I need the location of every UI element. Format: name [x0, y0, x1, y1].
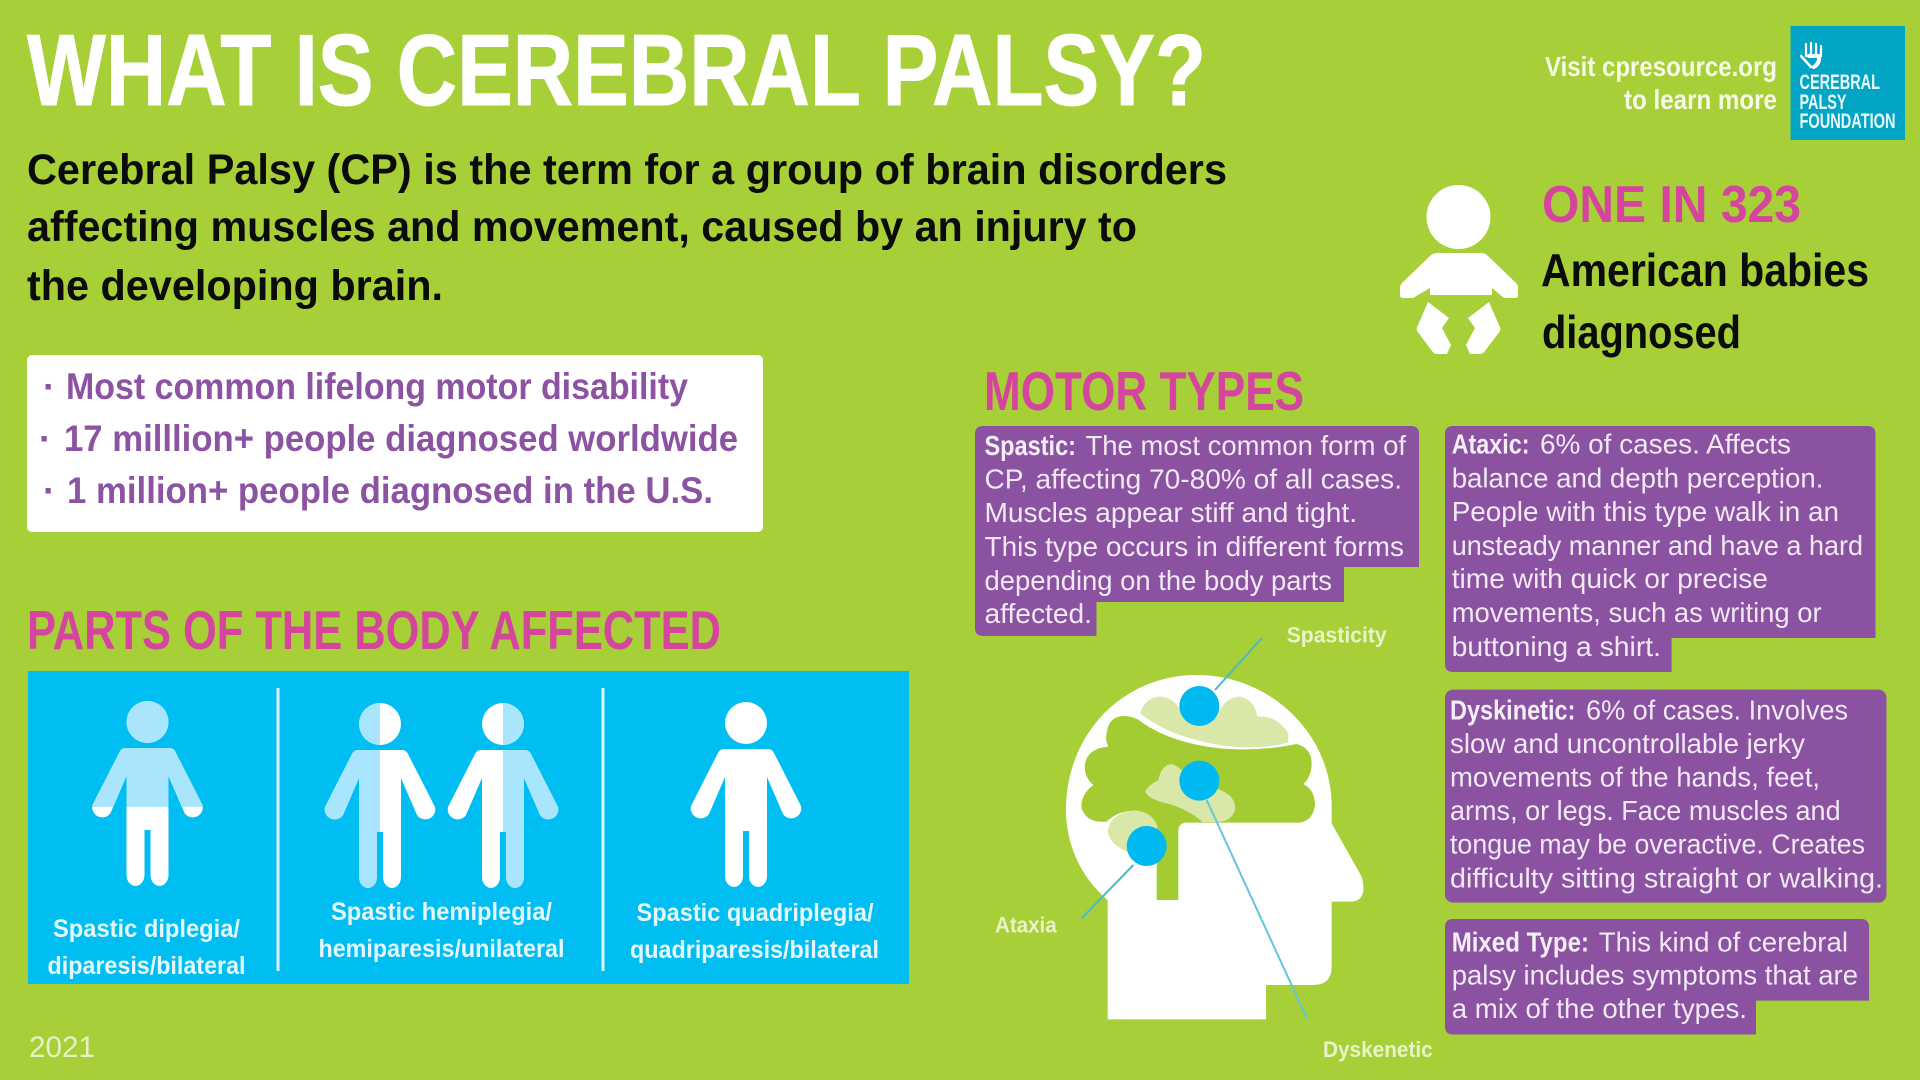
stat: one in 323: ONE IN 323 — [1542, 176, 1801, 234]
stat: one in 323: diagnosed — [1542, 306, 1741, 358]
panel: spastic: This type occurs in different forms — [984, 531, 1404, 562]
label: hemiplegia — [318, 898, 564, 963]
label: hemiplegia: hemiparesis/unilateral — [318, 935, 564, 963]
panel: spastic — [975, 426, 1419, 636]
logo: cerebral palsy foundation — [1790, 26, 1905, 140]
panel: ataxic: Ataxic: — [1452, 429, 1530, 460]
stat: one in 323: American babies — [1541, 244, 1869, 296]
icon: baby — [1400, 185, 1518, 354]
panel: spastic: Muscles appear stiff and tight. — [984, 497, 1357, 528]
panel: ataxic: buttoning a shirt. — [1452, 631, 1661, 662]
label: quadriplegia: quadriparesis/bilateral — [630, 936, 879, 964]
logo: cerebral palsy foundation: PALSY — [1800, 91, 1846, 114]
intro definition text: the developing brain. — [27, 262, 443, 310]
intro definition text: affecting muscles and movement, caused by an injury to — [27, 203, 1137, 251]
panel: key facts: 17 milllion+ people diagnosed worldwide — [64, 418, 738, 459]
head silhouette — [1066, 675, 1363, 1019]
panel: dyskinetic: Dyskinetic: — [1450, 694, 1575, 725]
panel: key facts: · — [43, 366, 55, 407]
intro definition text — [27, 146, 1227, 310]
panel: key facts: 1 million+ people diagnosed in the U.S. — [67, 470, 713, 511]
label: hemiplegia: Spastic hemiplegia/ — [331, 898, 552, 926]
diagram: brain in head — [995, 623, 1433, 1062]
panel: mixed type: Mixed Type: — [1452, 927, 1589, 958]
label: diplegia: Spastic diplegia/ — [53, 915, 240, 943]
label: diplegia: diparesis/bilateral — [48, 952, 246, 980]
panel: dyskinetic: slow and uncontrollable jerky — [1450, 728, 1805, 759]
panel: ataxic: balance and depth perception. — [1452, 463, 1823, 494]
icon: figure quadriplegia — [691, 702, 801, 887]
icon: figure spastic diplegia — [92, 701, 203, 886]
intro definition text: Cerebral Palsy (CP) is the term for a group of brain disorders — [27, 146, 1227, 194]
panel: key facts: · — [43, 470, 55, 511]
panel: ataxic — [1445, 426, 1876, 672]
logo: cerebral palsy foundation: CEREBRAL — [1800, 71, 1880, 94]
panel: ataxic: time with quick or precise — [1452, 563, 1768, 594]
label: spasticity: Spasticity — [1287, 623, 1387, 648]
panel: dyskinetic: arms, or legs. Face muscles and — [1450, 795, 1841, 826]
panel: mixed type — [1445, 919, 1869, 1034]
label: ataxia: Ataxia — [995, 913, 1057, 938]
upper affected region — [1140, 697, 1288, 748]
panel: mixed type: palsy includes symptoms that are — [1452, 960, 1858, 991]
panel: ataxic: movements, such as writing or — [1452, 597, 1822, 628]
brain cutout — [1081, 716, 1315, 900]
panel: mixed type: a mix of the other types. — [1452, 993, 1747, 1024]
panel: key facts: Most common lifelong motor disability — [66, 366, 688, 407]
panel: mixed type: This kind of cerebral — [1599, 927, 1848, 958]
panel: dyskinetic: tongue may be overactive. Creates — [1450, 829, 1865, 860]
label: quadriplegia — [630, 899, 879, 964]
panel: key facts: · — [39, 418, 51, 459]
middle affected region — [1145, 764, 1235, 822]
panel: dyskinetic: movements of the hands, feet, — [1450, 762, 1820, 793]
panel: spastic: CP, affecting 70-80% of all cases. — [984, 463, 1402, 494]
panel: ataxic: 6% of cases. Affects — [1540, 429, 1791, 460]
title: WHAT IS CEREBRAL PALSY? — [27, 15, 1206, 127]
panel: dyskinetic: difficulty sitting straight or walking. — [1450, 863, 1883, 894]
panel: dyskinetic — [1445, 690, 1886, 903]
year: 2021 — [29, 1031, 95, 1064]
panel: spastic: Spastic: — [984, 430, 1076, 461]
panel: spastic: depending on the body parts — [984, 565, 1332, 596]
lower affected region — [1108, 811, 1157, 852]
stat: one in 323 — [1541, 176, 1869, 358]
label: diplegia — [48, 915, 246, 980]
panel: key facts — [27, 355, 763, 532]
panel: ataxic: People with this type walk in an — [1452, 496, 1839, 527]
icon: figure hemiplegia left — [325, 703, 435, 888]
icon: hand — [1801, 43, 1821, 67]
visit link text: to learn more — [1624, 84, 1777, 115]
panel: dyskinetic: 6% of cases. Involves — [1586, 694, 1848, 725]
panel: spastic: affected. — [984, 598, 1092, 629]
panel: ataxic: unsteady manner and have a hard — [1452, 530, 1863, 561]
heading: parts of the body affected: PARTS OF THE BODY AFFECTED — [27, 599, 721, 661]
panel: body parts diagram — [28, 671, 909, 984]
visit link text: Visit cpresource.org — [1545, 51, 1777, 82]
leader lines — [1082, 638, 1307, 1019]
visit link text — [1545, 51, 1777, 115]
label: dyskenetic: Dyskenetic — [1323, 1037, 1433, 1062]
label: quadriplegia: Spastic quadriplegia/ — [636, 899, 874, 927]
panel: spastic: The most common form of — [1086, 430, 1406, 461]
affected area markers — [1127, 686, 1219, 866]
heading: motor types: MOTOR TYPES — [984, 360, 1304, 422]
icon: figure hemiplegia right — [448, 703, 558, 888]
